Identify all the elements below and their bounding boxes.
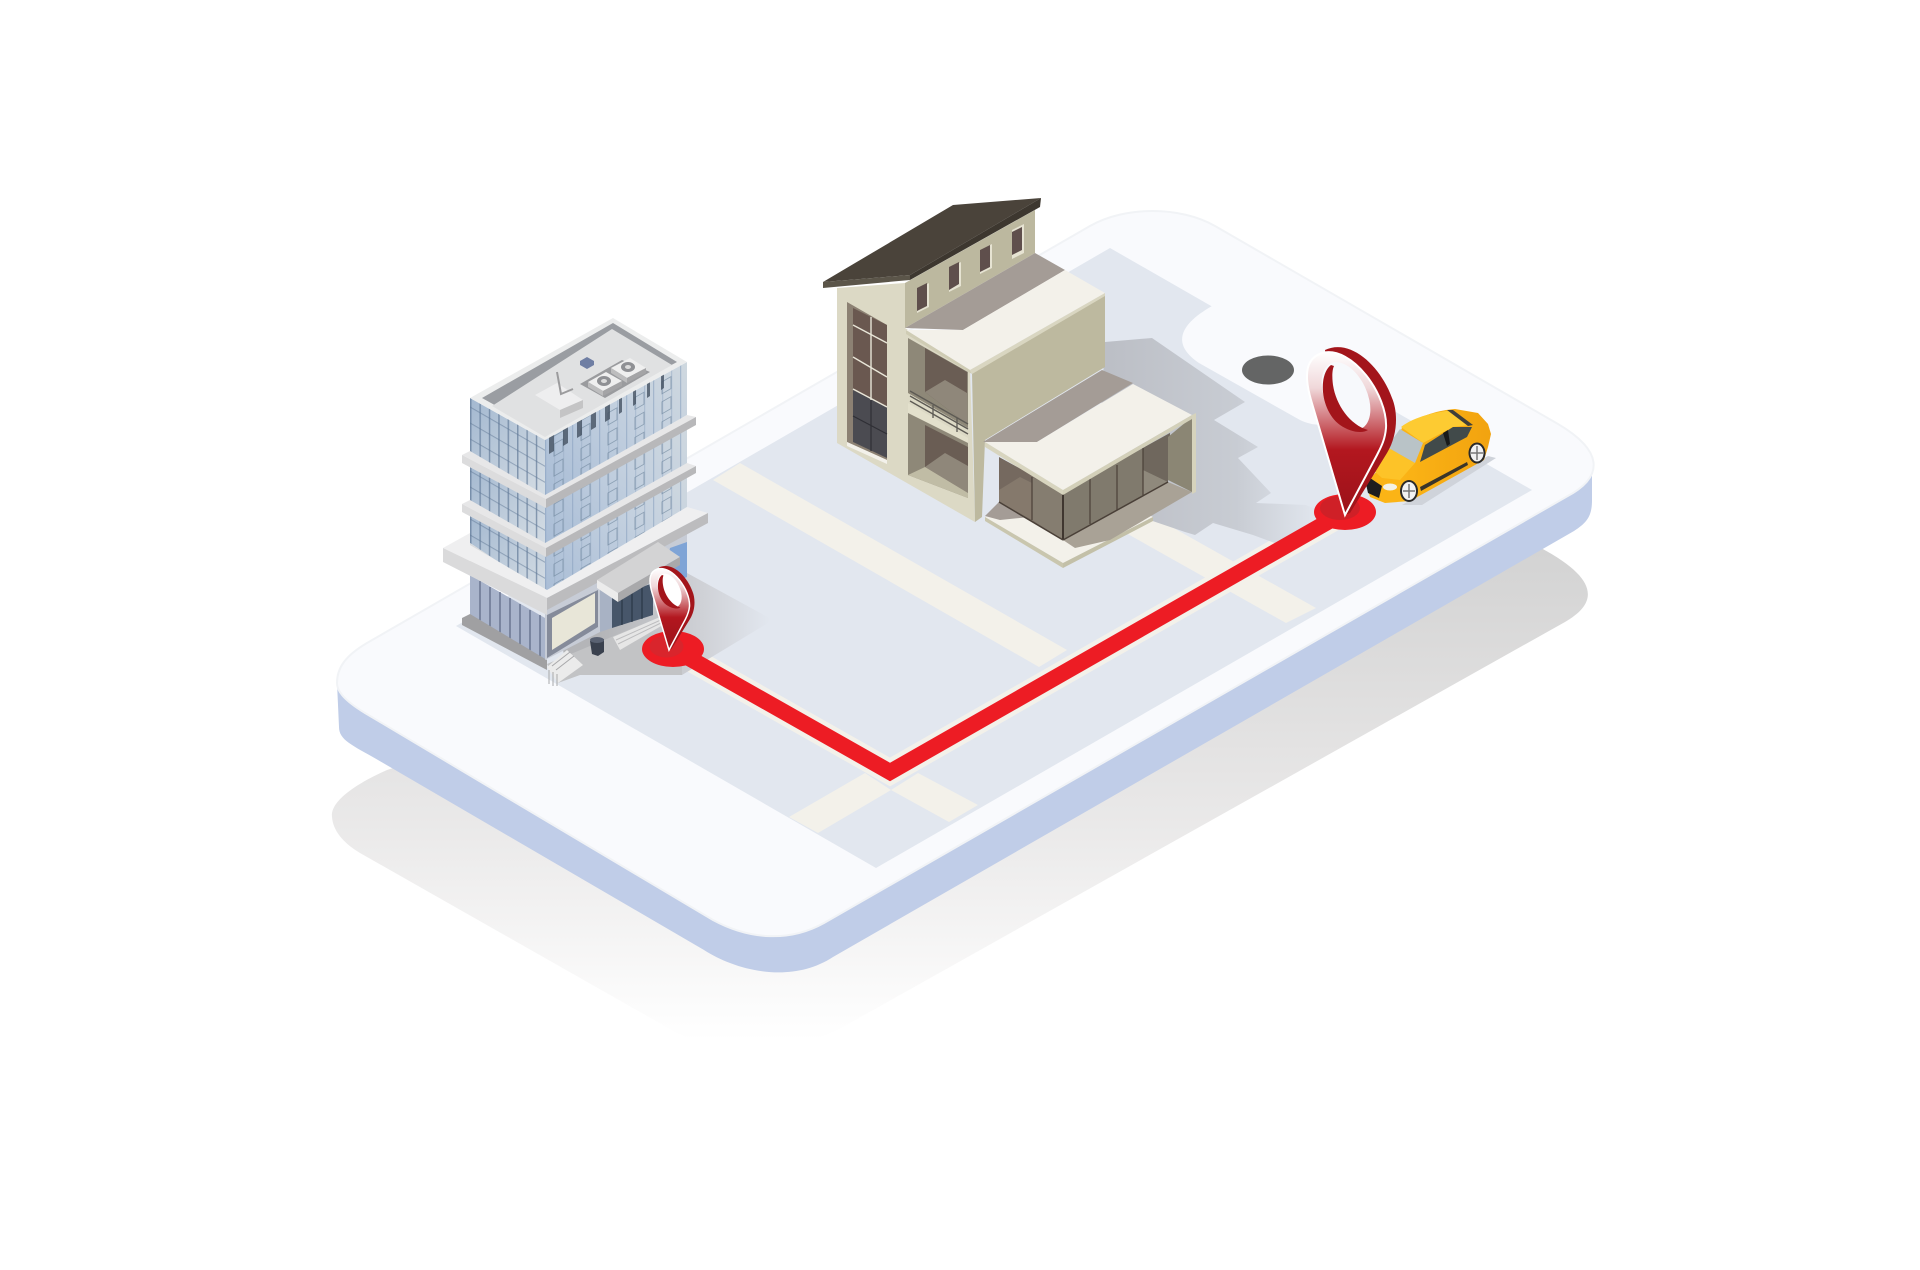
ground shadow bbox=[332, 470, 1588, 1052]
upper fin shadows bbox=[549, 371, 664, 454]
car side windows bbox=[1420, 427, 1472, 462]
car sill bbox=[1420, 462, 1468, 491]
streets bbox=[673, 463, 1345, 833]
office cast shadow bbox=[560, 560, 773, 675]
tower window bbox=[847, 302, 887, 464]
phone side wall bbox=[337, 460, 1592, 972]
floor 2 left glass bbox=[470, 463, 545, 545]
house bbox=[823, 198, 1196, 568]
end marker disc bbox=[1314, 494, 1376, 530]
floor 1 left glass bbox=[470, 398, 545, 497]
podium ledge bbox=[443, 507, 708, 615]
main right wall bbox=[972, 295, 1105, 522]
front steps bbox=[613, 617, 668, 650]
side blue window bbox=[663, 542, 687, 587]
AC unit 1 bbox=[588, 372, 622, 396]
car rear spoiler bbox=[1447, 410, 1473, 426]
entrance canopy bbox=[597, 542, 680, 602]
skylight bbox=[535, 372, 583, 418]
clerestory windows bbox=[917, 224, 1024, 313]
rear wheel bbox=[1468, 442, 1486, 464]
roof shadow upper terrace bbox=[905, 253, 1065, 330]
annex glass right bbox=[1063, 433, 1170, 540]
house base slab bbox=[985, 480, 1153, 568]
annex roof bbox=[985, 384, 1192, 490]
start marker disc bbox=[642, 631, 704, 667]
icon: start pin bbox=[650, 566, 695, 658]
office building bbox=[443, 318, 708, 686]
annex roof shadow bbox=[983, 370, 1133, 442]
car windshield bbox=[1387, 429, 1423, 463]
car hood bbox=[1373, 447, 1415, 480]
roof vent box bbox=[580, 357, 594, 369]
upper terrace roof bbox=[906, 270, 1105, 370]
floor 1 right glass bbox=[545, 362, 687, 497]
ledge 2 bbox=[462, 463, 696, 557]
main left wall bbox=[837, 283, 975, 522]
phone top face bbox=[337, 211, 1594, 936]
entry plaza bbox=[547, 625, 682, 683]
car roof bbox=[1401, 410, 1470, 443]
floor 3 right glass bbox=[545, 473, 687, 593]
entrance door bbox=[600, 583, 653, 632]
house cast shadow bbox=[1100, 338, 1330, 545]
lower recess bbox=[908, 413, 968, 498]
annex floor shadow bbox=[1063, 482, 1192, 548]
speaker dot bbox=[1242, 356, 1294, 384]
camera notch bbox=[1182, 306, 1369, 425]
front wheel bbox=[1400, 480, 1418, 502]
AC pad bbox=[580, 360, 650, 398]
main roof bbox=[823, 198, 1041, 288]
car ground shadow bbox=[1402, 456, 1496, 505]
map screen area bbox=[456, 248, 1532, 868]
annex glass left bbox=[999, 457, 1063, 540]
icon: destination pin bbox=[1307, 347, 1396, 520]
balcony railing bbox=[910, 391, 968, 434]
trash bin bbox=[590, 637, 604, 656]
roof slab bbox=[470, 318, 687, 440]
icon: car bbox=[1366, 409, 1496, 505]
side stairs bbox=[547, 650, 583, 686]
car grille bbox=[1366, 478, 1382, 498]
upper balcony recess bbox=[908, 338, 968, 443]
upper clerestory wall bbox=[905, 210, 1035, 328]
ledge 1 bbox=[462, 415, 696, 508]
car headlight bbox=[1383, 484, 1397, 490]
AC unit 2 bbox=[611, 358, 646, 383]
car body bbox=[1366, 409, 1491, 503]
route line bbox=[642, 494, 1376, 772]
floor 3 left glass bbox=[470, 512, 545, 593]
floor 2 right glass bbox=[545, 425, 687, 545]
annex end wall bbox=[1168, 417, 1192, 492]
ground floor right facade bbox=[545, 530, 687, 660]
shop window bbox=[547, 590, 598, 658]
base stripes facade bbox=[462, 575, 547, 670]
